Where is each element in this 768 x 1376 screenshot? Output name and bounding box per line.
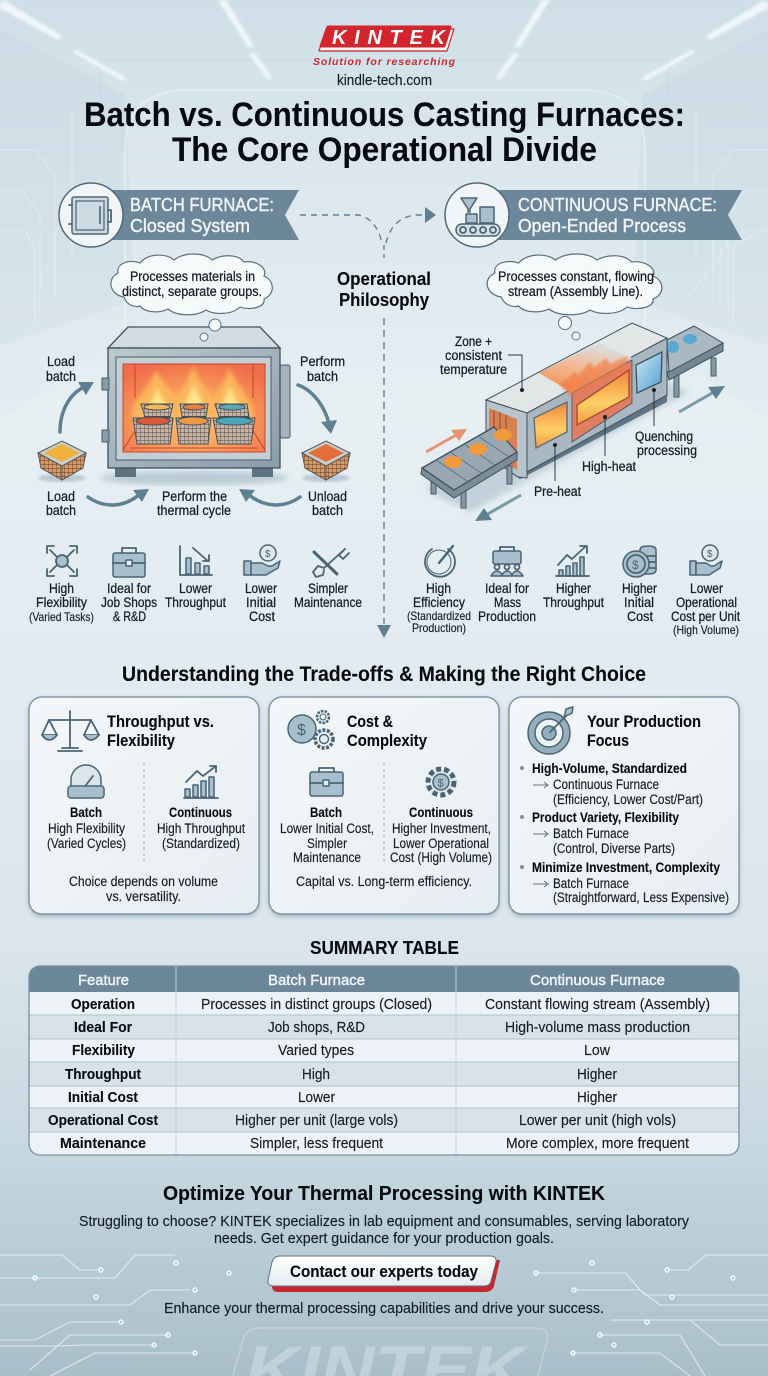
labels: continuous furnace zones: Quenching xyxy=(635,429,693,444)
feature: lower throughput xyxy=(165,546,226,610)
row: throughput xyxy=(65,1067,617,1083)
panel: your production focus: (Straightforward, Less Expensive) xyxy=(553,890,729,905)
feature: lower operational cost per unit: (High Volume) xyxy=(673,623,739,637)
row: ideal for: Job shops, R&D xyxy=(268,1020,365,1036)
row: flexibility: Low xyxy=(584,1043,611,1059)
feature: ideal for mass production xyxy=(478,547,536,624)
row: flexibility: Flexibility xyxy=(72,1043,135,1059)
labels: batch cycle: batch xyxy=(307,368,338,384)
table: summary xyxy=(29,966,739,1155)
icon: falling chart xyxy=(180,546,212,575)
illustration: batch furnace xyxy=(99,327,290,485)
feature: simpler maintenance: Maintenance xyxy=(294,594,362,610)
icon: dollar gear: $ xyxy=(438,778,444,790)
feature: ideal for mass production: Ideal for xyxy=(485,580,529,596)
logo: KINTEK xyxy=(313,27,456,68)
panel: your production focus: Minimize Investment, Complexity xyxy=(532,860,720,875)
quench window xyxy=(636,352,662,393)
row: operation: Processes in distinct groups (Closed) xyxy=(201,997,432,1013)
title xyxy=(84,96,685,169)
feature: high efficiency: Efficiency xyxy=(413,594,465,610)
panel: your production focus: High-Volume, Standardized xyxy=(532,761,687,776)
icon: dollar and gears: $ xyxy=(297,722,306,739)
furnace body xyxy=(514,393,667,479)
row: operational cost: Operational Cost xyxy=(48,1113,158,1129)
row: operation xyxy=(71,997,710,1013)
text block: intro: Struggling to choose? KINTEK specializes in lab equipment and consumables, serving laboratory xyxy=(79,1213,689,1230)
banner: batch furnace: Closed System xyxy=(130,215,250,236)
labels: continuous furnace zones xyxy=(440,334,697,499)
labels: continuous furnace zones: Pre-heat xyxy=(534,484,581,499)
icon: scales xyxy=(42,711,99,751)
icon: coin stacks: $ xyxy=(632,558,639,572)
row: maintenance: Simpler, less frequent xyxy=(250,1136,383,1152)
feature: ideal for job shops xyxy=(101,548,157,624)
icon: briefcase and people xyxy=(491,547,523,576)
text block: intro: needs. Get expert guidance for your production goals. xyxy=(214,1230,554,1247)
labels: continuous furnace zones: consistent xyxy=(445,348,502,363)
row: operational cost: Lower per unit (high vols) xyxy=(519,1113,676,1129)
banner: batch furnace xyxy=(59,183,299,247)
heading: optimize: Optimize Your Thermal Processing with KINTEK xyxy=(163,1182,605,1205)
button: contact xyxy=(268,1256,500,1292)
labels: batch cycle: Perform xyxy=(300,353,345,369)
row: operation: Operation xyxy=(71,997,135,1013)
panel: throughput vs flexibility: (Standardized) xyxy=(162,836,240,851)
icon: furnace door xyxy=(59,183,123,247)
feature: simpler maintenance xyxy=(294,549,362,610)
panel: your production focus: (Efficiency, Lower Cost/Part) xyxy=(553,792,703,807)
banner: continuous furnace: Open-Ended Process xyxy=(518,215,686,236)
feature: lower throughput: Lower xyxy=(179,580,212,596)
feature: higher initial cost: Cost xyxy=(627,608,653,624)
labels: batch cycle xyxy=(46,353,347,518)
labels: continuous furnace zones: High-heat xyxy=(582,459,636,474)
panel: throughput vs flexibility: Throughput vs. xyxy=(107,712,214,731)
feature: high efficiency: Production) xyxy=(412,621,466,635)
feature: high efficiency: High xyxy=(426,580,451,596)
banner: continuous furnace: CONTINUOUS FURNACE: xyxy=(518,194,717,215)
heading: trade-offs: Understanding the Trade-offs & Making the Right Choice xyxy=(122,663,646,686)
website url: kindle-tech.com xyxy=(337,73,432,89)
feature: simpler maintenance: Simpler xyxy=(308,580,348,596)
icon: load basket xyxy=(38,441,86,482)
row: initial cost: Initial Cost xyxy=(68,1090,138,1106)
labels: continuous furnace zones: Zone + xyxy=(455,334,492,349)
icon: dollar gear xyxy=(428,769,454,795)
panel: throughput vs flexibility: Batch xyxy=(70,805,102,820)
table header: Continuous Furnace xyxy=(530,973,665,989)
feature: higher throughput xyxy=(543,546,604,610)
labels: batch cycle: Perform the xyxy=(162,488,227,504)
feature: lower initial cost: Initial xyxy=(246,594,276,610)
feature: ideal for job shops: Ideal for xyxy=(107,580,151,596)
icon: conveyor with hopper xyxy=(445,183,509,247)
logo: KINTEK: KINTEK xyxy=(332,27,447,49)
text block: closing: Enhance your thermal processing capabilities and drive your success. xyxy=(164,1300,604,1317)
table header xyxy=(78,973,665,989)
feature: ideal for job shops: & R&D xyxy=(113,608,146,624)
row: ideal for: Ideal For xyxy=(74,1020,132,1036)
panel: throughput vs flexibility: vs. versatility. xyxy=(106,889,181,904)
text block: intro xyxy=(79,1213,689,1247)
labels: batch cycle: batch xyxy=(46,502,76,518)
panel: your production focus: Continuous Furnace xyxy=(553,777,659,792)
panel: cost and complexity: Higher Investment, xyxy=(392,821,491,836)
panel: your production focus: Your Production xyxy=(587,712,701,731)
heading: operational philosophy: Operational xyxy=(337,268,431,289)
icon: thought bubbles batch xyxy=(200,319,221,341)
row: flexibility: Varied types xyxy=(278,1043,354,1059)
panel: throughput vs flexibility: (Varied Cycles) xyxy=(47,836,126,851)
feature: lower operational cost per unit: Operational xyxy=(676,594,737,610)
panel: throughput vs flexibility xyxy=(29,697,259,914)
labels: batch cycle: thermal cycle xyxy=(157,502,231,518)
panel: cost and complexity: Maintenance xyxy=(293,850,361,865)
panel: throughput vs flexibility: High Throughput xyxy=(157,821,245,836)
logo: KINTEK: Solution for researching xyxy=(313,56,456,68)
row: initial cost: Lower xyxy=(298,1090,335,1106)
feature: higher initial cost: Higher xyxy=(622,580,657,596)
panel: your production focus: Batch Furnace xyxy=(553,826,629,841)
panel: cost and complexity: Cost (High Volume) xyxy=(390,850,492,865)
callout: continuous cloud: stream (Assembly Line). xyxy=(508,284,643,299)
icon: briefcase xyxy=(113,548,145,577)
feature: lower throughput: Throughput xyxy=(165,594,226,610)
feature: lower initial cost: Lower xyxy=(245,580,277,596)
feature: ideal for mass production: Mass xyxy=(494,594,521,610)
feature: higher initial cost: Initial xyxy=(624,594,654,610)
row: operation: Constant flowing stream (Assembly) xyxy=(485,997,710,1013)
feature: ideal for mass production: Production xyxy=(478,608,536,624)
labels: batch cycle: batch xyxy=(46,368,76,384)
row: ideal for xyxy=(74,1020,690,1036)
icon: rising chart xyxy=(556,546,589,576)
labels: continuous furnace zones: processing xyxy=(637,443,697,458)
icon: tools xyxy=(313,549,349,577)
feature: ideal for job shops: Job Shops xyxy=(101,594,157,610)
title: Batch vs. Continuous Casting Furnaces: xyxy=(84,96,685,134)
heading: operational philosophy xyxy=(337,268,431,310)
feature: high efficiency: (Standardized xyxy=(407,609,471,623)
panel: throughput vs flexibility: Flexibility xyxy=(107,731,175,750)
panel: your production focus: (Control, Diverse Parts) xyxy=(553,841,675,856)
panel: cost and complexity: Lower Operational xyxy=(393,836,489,851)
panel: throughput vs flexibility: Choice depends on volume xyxy=(69,874,218,889)
panel: cost and complexity: Batch xyxy=(310,805,342,820)
title: The Core Operational Divide xyxy=(172,131,597,169)
labels: batch cycle: Unload xyxy=(308,488,347,504)
left conveyor xyxy=(421,427,517,508)
row: throughput: Higher xyxy=(577,1067,617,1083)
row: flexibility xyxy=(72,1043,611,1059)
feature: lower operational cost per unit xyxy=(671,545,740,637)
heading: operational philosophy: Philosophy xyxy=(339,289,430,310)
right conveyor xyxy=(667,326,723,397)
arrows: continuous flow xyxy=(426,386,725,521)
feature: high flexibility: (Varied Tasks) xyxy=(29,610,94,624)
illustration: continuous furnace xyxy=(421,323,723,512)
feature: higher initial cost xyxy=(622,546,657,624)
feature: higher throughput: Throughput xyxy=(543,594,604,610)
feature: lower operational cost per unit: Lower xyxy=(690,580,723,596)
table header: Feature xyxy=(78,973,129,989)
icon: arrows out xyxy=(47,546,77,576)
panel: cost and complexity xyxy=(269,697,499,914)
flames xyxy=(132,366,254,420)
panel: your production focus: Batch Furnace xyxy=(553,876,629,891)
panel: cost and complexity: Complexity xyxy=(347,731,427,750)
callout: continuous cloud: Processes constant, flowing xyxy=(498,269,654,284)
row: throughput: Throughput xyxy=(65,1067,141,1083)
panel: throughput vs flexibility: Continuous xyxy=(169,805,232,820)
callout: batch cloud: Processes materials in xyxy=(130,269,255,284)
callout: batch cloud: distinct, separate groups. xyxy=(122,284,262,299)
feature: lower initial cost: Cost xyxy=(249,608,275,624)
icon: hand with coin: $ xyxy=(265,549,271,560)
arrow: vertical divider xyxy=(377,318,391,638)
callout: batch cloud xyxy=(111,254,272,315)
banner: batch furnace: BATCH FURNACE: xyxy=(130,194,274,215)
labels: continuous furnace zones: temperature xyxy=(440,362,507,377)
panel: cost and complexity: Continuous xyxy=(409,805,473,820)
pre-heat window xyxy=(534,402,567,448)
feature: higher throughput: Higher xyxy=(556,580,591,596)
panel: your production focus xyxy=(509,697,739,914)
feature: high efficiency xyxy=(407,546,471,635)
panel: cost and complexity: Capital vs. Long-term efficiency. xyxy=(296,874,472,889)
row: operational cost xyxy=(48,1113,676,1129)
labels: batch cycle: Load xyxy=(47,353,75,369)
labels: batch cycle: batch xyxy=(312,502,343,518)
panel: cost and complexity: Cost & xyxy=(347,712,393,731)
row: maintenance: More complex, more frequent xyxy=(506,1136,689,1152)
row: initial cost xyxy=(68,1090,617,1106)
panel: your production focus: Focus xyxy=(587,731,629,750)
panel: your production focus: Product Variety, Flexibility xyxy=(532,810,679,825)
feature: high flexibility: High xyxy=(49,580,74,596)
feature: high flexibility xyxy=(29,546,94,624)
heading: summary table: SUMMARY TABLE xyxy=(310,938,459,958)
callout: continuous cloud xyxy=(487,254,662,340)
icon: target xyxy=(528,707,573,754)
feature: lower initial cost xyxy=(244,545,280,624)
row: maintenance: Maintenance xyxy=(60,1136,146,1152)
icon: gauge xyxy=(425,546,455,577)
icon: rising chart xyxy=(184,766,218,798)
icon: hand with coin: $ xyxy=(707,549,713,560)
icon: dollar and gears xyxy=(288,711,333,748)
panel: cost and complexity: Simpler xyxy=(307,836,347,851)
row: operational cost: Higher per unit (large vols) xyxy=(235,1113,398,1129)
row: initial cost: Higher xyxy=(577,1090,617,1106)
row: maintenance xyxy=(60,1136,689,1152)
flames on top xyxy=(560,356,628,396)
icon: briefcase xyxy=(310,768,343,796)
arrows: batch cycle xyxy=(60,382,337,505)
row: ideal for: High-volume mass production xyxy=(505,1020,690,1036)
icon: gauge xyxy=(68,765,104,798)
baskets in furnace xyxy=(133,404,255,444)
panel: cost and complexity: Lower Initial Cost, xyxy=(280,821,374,836)
feature: lower operational cost per unit: Cost per Unit xyxy=(671,608,740,624)
row: throughput: High xyxy=(302,1067,330,1083)
table header: Batch Furnace xyxy=(268,973,365,989)
button: contact: Contact our experts today xyxy=(290,1263,479,1281)
labels: batch cycle: Load xyxy=(47,488,75,504)
high-heat panel xyxy=(572,360,632,442)
icon: unload basket xyxy=(302,441,350,482)
arrow: operational philosophy split xyxy=(300,207,436,258)
feature: high flexibility: Flexibility xyxy=(36,594,87,610)
panel: throughput vs flexibility: High Flexibility xyxy=(48,821,125,836)
banner: continuous furnace xyxy=(445,183,742,247)
